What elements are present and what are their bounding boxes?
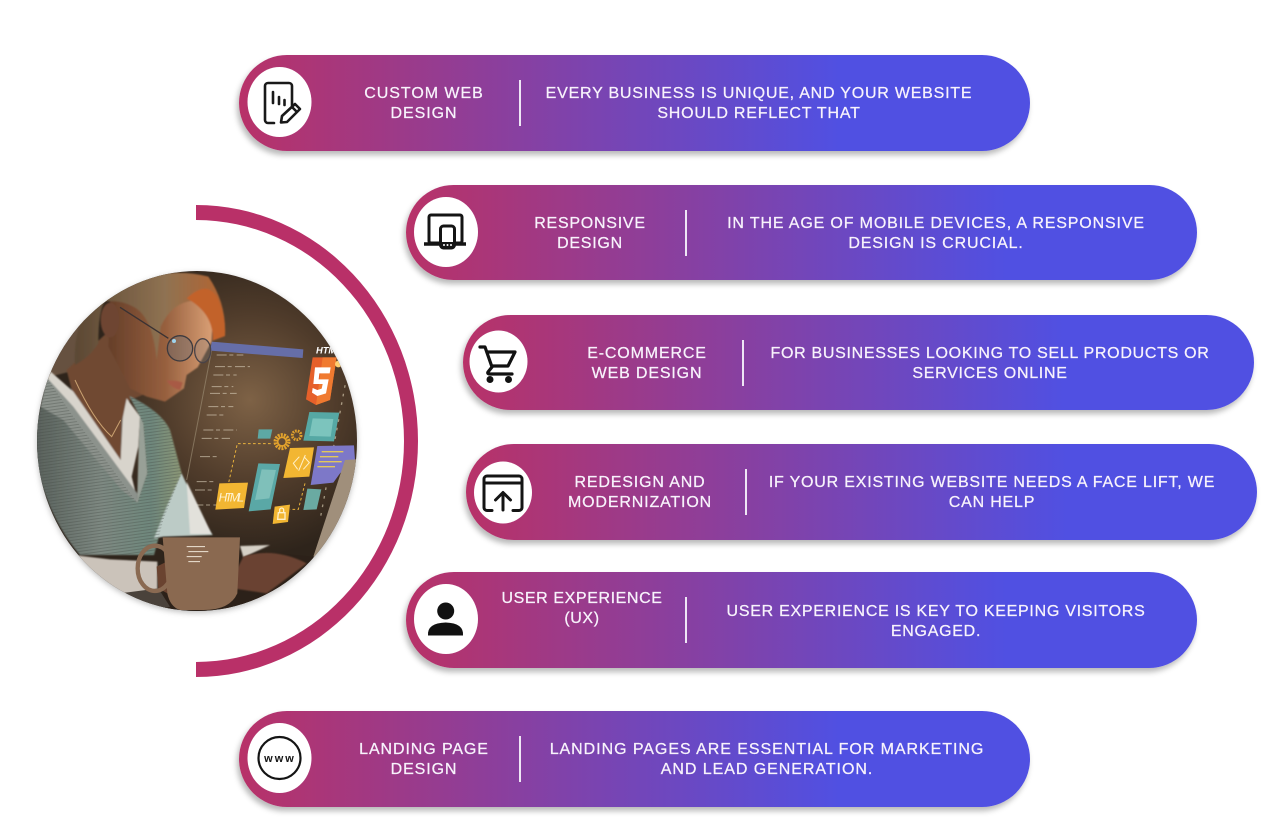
pill: responsive design <box>406 185 1197 280</box>
sweater body <box>36 377 182 555</box>
woman <box>36 273 270 593</box>
description <box>727 215 1145 252</box>
description: SHOULD REFLECT THAT <box>657 105 861 122</box>
head <box>108 293 213 402</box>
hair <box>75 273 225 365</box>
left cuff <box>73 555 157 593</box>
icon: window with upload arrow <box>474 462 532 524</box>
description <box>546 85 972 122</box>
pill: e-commerce web design <box>463 315 1254 410</box>
description: FOR BUSINESSES LOOKING TO SELL PRODUCTS OR <box>771 345 1209 362</box>
mug <box>138 537 240 610</box>
pill: user experience <box>406 572 1197 668</box>
service title: MODERNIZATION <box>568 494 712 511</box>
service title: DESIGN <box>390 105 458 122</box>
description <box>727 603 1145 640</box>
yellow cards <box>283 447 314 478</box>
teal cards <box>303 412 339 441</box>
white collar <box>47 372 140 503</box>
service title: USER EXPERIENCE <box>501 590 663 607</box>
description: DESIGN IS CRUCIAL. <box>848 235 1024 252</box>
service title <box>364 85 484 122</box>
icon: shopping cart <box>470 330 528 392</box>
service title: E-COMMERCE <box>587 345 707 362</box>
photo: developer with holographic code <box>34 270 360 616</box>
service title <box>359 741 489 778</box>
gears <box>275 435 289 448</box>
description: USER EXPERIENCE IS KEY TO KEEPING VISITORS <box>727 603 1145 620</box>
description <box>771 345 1209 382</box>
dashed connectors <box>229 444 305 509</box>
decorative arc <box>196 205 418 677</box>
shirt sleeve <box>154 473 213 538</box>
description: IN THE AGE OF MOBILE DEVICES, A RESPONSIVE <box>727 215 1145 232</box>
icon: user <box>414 584 478 654</box>
html5 badge <box>306 346 342 405</box>
neck and chest <box>67 330 147 460</box>
laptop <box>313 459 357 557</box>
service title <box>587 345 707 382</box>
hand <box>233 553 307 593</box>
icon: laptop and phone <box>414 197 478 267</box>
service title <box>501 590 663 627</box>
icon: www globe: www <box>263 753 296 765</box>
service title <box>568 474 712 511</box>
service title: LANDING PAGE <box>359 741 489 758</box>
service title: (UX) <box>564 610 600 627</box>
icon: www globe <box>248 723 312 793</box>
pill: redesign and modernization <box>466 444 1257 540</box>
description: CAN HELP <box>949 494 1035 511</box>
html5 badge: HTML <box>316 346 342 356</box>
holographic header bar <box>210 342 303 358</box>
sweater knit texture <box>36 377 182 555</box>
photo: developer with holographic code: HTML <box>219 491 244 505</box>
icon: document with chart and pencil <box>248 67 312 137</box>
ribbed neckline <box>41 377 137 503</box>
purple code card <box>311 445 355 485</box>
service title: DESIGN <box>391 761 457 778</box>
service title: RESPONSIVE <box>534 215 646 232</box>
pill: custom web design <box>239 55 1030 151</box>
pill: landing page design <box>239 711 1030 807</box>
description: ENGAGED. <box>891 623 981 640</box>
description: SERVICES ONLINE <box>912 365 1068 382</box>
service title: CUSTOM WEB <box>364 85 484 102</box>
service title: REDESIGN AND <box>574 474 706 491</box>
service title: WEB DESIGN <box>592 365 702 382</box>
description: LANDING PAGES ARE ESSENTIAL FOR MARKETING <box>550 741 984 758</box>
description: EVERY BUSINESS IS UNIQUE, AND YOUR WEBSITE <box>546 85 972 102</box>
code column <box>193 355 250 505</box>
service title: DESIGN <box>557 235 623 252</box>
description: IF YOUR EXISTING WEBSITE NEEDS A FACE LIFT, WE <box>769 474 1215 491</box>
description: AND LEAD GENERATION. <box>661 761 873 778</box>
necklace <box>75 380 121 437</box>
description <box>550 741 984 778</box>
service title <box>534 215 646 252</box>
description <box>769 474 1215 511</box>
glasses <box>120 307 211 363</box>
